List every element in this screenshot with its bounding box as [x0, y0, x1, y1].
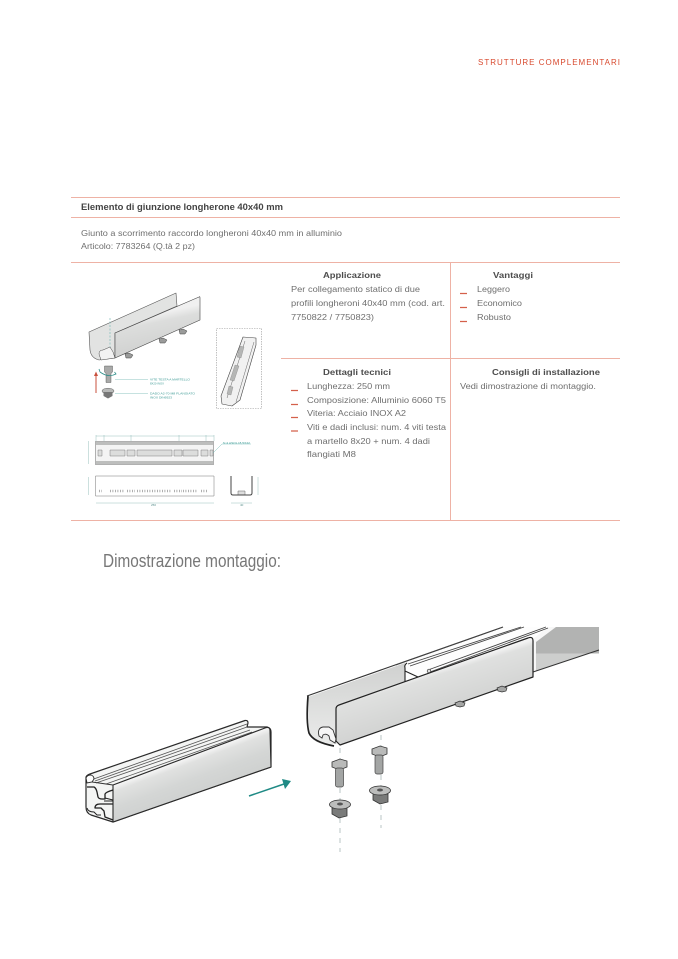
product title: Elemento di giunzione longherone 40x40 mm [81, 202, 283, 212]
panel: applicazione: 7750822 / 7750823) [291, 312, 374, 322]
diagram: top technical drawing [88, 435, 251, 464]
panel: dettagli tecnici: Composizione: Alluminio 6060 T5 [307, 395, 446, 405]
panel: dettagli tecnici: Viteria: Acciaio INOX A2 [307, 408, 406, 418]
product description [81, 228, 342, 251]
illustration: joint inserted in rail [307, 627, 599, 746]
panel: dettagli tecnici: Viti e dadi inclusi: num. 4 viti testa [307, 422, 446, 432]
front panel [336, 637, 533, 745]
diagram: small joint assembly: VITE TESTA A MARTELLO [150, 378, 191, 382]
diagram: section drawing: 40 [240, 503, 244, 507]
diagram: small joint assembly [89, 293, 200, 400]
extended rail [533, 627, 599, 672]
panel: consigli di installazione [460, 367, 600, 391]
table rules [71, 198, 620, 520]
panel: applicazione: Per collegamento statico di due [291, 284, 420, 294]
panel: vantaggi: Economico [477, 298, 522, 308]
product description: Giunto a scorrimento raccordo longheroni 40x40 mm in alluminio [81, 228, 342, 238]
diagram: top technical drawing: N.4 ASOLI 8,5X22 [223, 441, 250, 445]
panel: dettagli tecnici: Dettagli tecnici [323, 367, 391, 377]
nuts under rail [455, 686, 507, 707]
panel: applicazione [291, 270, 445, 322]
panel: dettagli tecnici: Lunghezza: 250 mm [307, 381, 390, 391]
diagram: small joint assembly: 8X20 INOX [150, 382, 164, 386]
diagram: small joint assembly: INOX DIN6923 [150, 396, 172, 400]
channel interior [307, 627, 548, 746]
illustration: bolts and nuts [330, 735, 390, 852]
panel: applicazione: profili longheroni 40x40 mm (cod. art. [291, 298, 445, 308]
panel: vantaggi: Vantaggi [493, 270, 533, 280]
panel: vantaggi: Leggero [477, 284, 510, 294]
diagram: small joint assembly: DADO A2-70 M8 FLANGIATO [150, 392, 196, 396]
panel: vantaggi: Robusto [477, 312, 511, 322]
panel: dettagli tecnici [291, 367, 446, 459]
hammer head in channel [318, 727, 336, 743]
diagram: section drawing [231, 476, 258, 507]
arrow: insertion direction [249, 779, 291, 796]
panel: consigli di installazione: Vedi dimostrazione di montaggio. [460, 381, 596, 391]
section header: STRUTTURE COMPLEMENTARI [478, 58, 620, 67]
diagram: side view drawing: 250 [151, 503, 156, 507]
diagram: side view drawing [88, 476, 214, 507]
diagram: joint view from below [216, 328, 262, 408]
panel: dettagli tecnici: a martello 8x20 + num. 4 dadi [307, 436, 430, 446]
illustration: aluminium profile [86, 720, 271, 822]
panel: vantaggi [460, 270, 533, 322]
panel: dettagli tecnici: flangiati M8 [307, 449, 356, 459]
panel: consigli di installazione: Consigli di installazione [492, 367, 600, 377]
panel: applicazione: Applicazione [323, 270, 381, 280]
product description: Articolo: 7783264 (Q.tà 2 pz) [81, 241, 195, 251]
section heading: Dimostrazione montaggio: [103, 551, 281, 571]
